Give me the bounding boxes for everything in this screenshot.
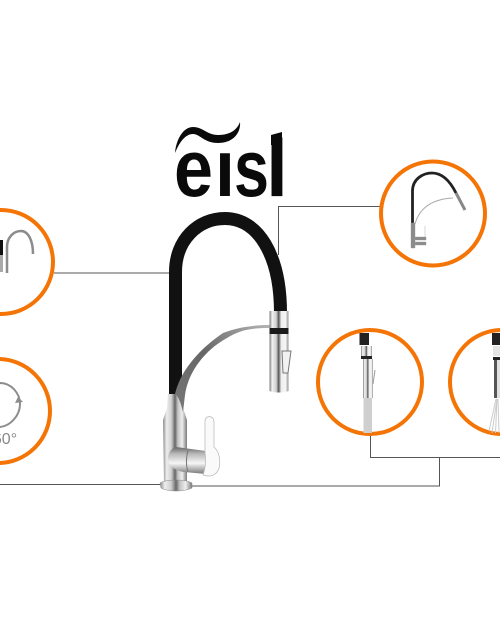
connector: hose callout line [54, 272, 169, 274]
connector: spray modes line [190, 436, 500, 486]
icon: spray head [492, 333, 500, 398]
connector: swivel callout line [0, 484, 163, 486]
icon: spray head [360, 333, 375, 398]
icon: water stream [364, 398, 372, 433]
logo: eisl: i [215, 124, 235, 214]
spray head [270, 311, 291, 392]
panel: straight jet icon [318, 330, 422, 434]
black flexible hose [176, 218, 280, 395]
base body [163, 394, 187, 482]
faucet [160, 218, 291, 491]
icon: mini pull-out head [456, 193, 465, 210]
connector: pull-out callout line [278, 206, 380, 255]
mixer body [168, 447, 206, 474]
chrome arc spout [175, 325, 270, 412]
icon: mini faucet hose [412, 173, 456, 223]
panel: 360 degree rotation icon [0, 359, 50, 463]
icon: water fan [489, 399, 499, 433]
panel: arc swivel spout icon [0, 210, 53, 314]
panel: shower spray icon [450, 330, 500, 434]
logo: eisl: e [174, 124, 213, 214]
panel: pull-out hose icon [381, 162, 485, 266]
icon: mini arc spout [415, 198, 453, 224]
icon: grey spout [7, 231, 33, 273]
lever handle [203, 417, 220, 476]
icon: black spout [0, 240, 3, 255]
base flange [160, 480, 192, 491]
icon: rotation arrow [0, 383, 20, 427]
logo: eisl: l [266, 124, 288, 214]
logo: eisl: s [234, 124, 269, 214]
icon: mini base [411, 223, 426, 248]
logo: eisl [174, 122, 288, 214]
